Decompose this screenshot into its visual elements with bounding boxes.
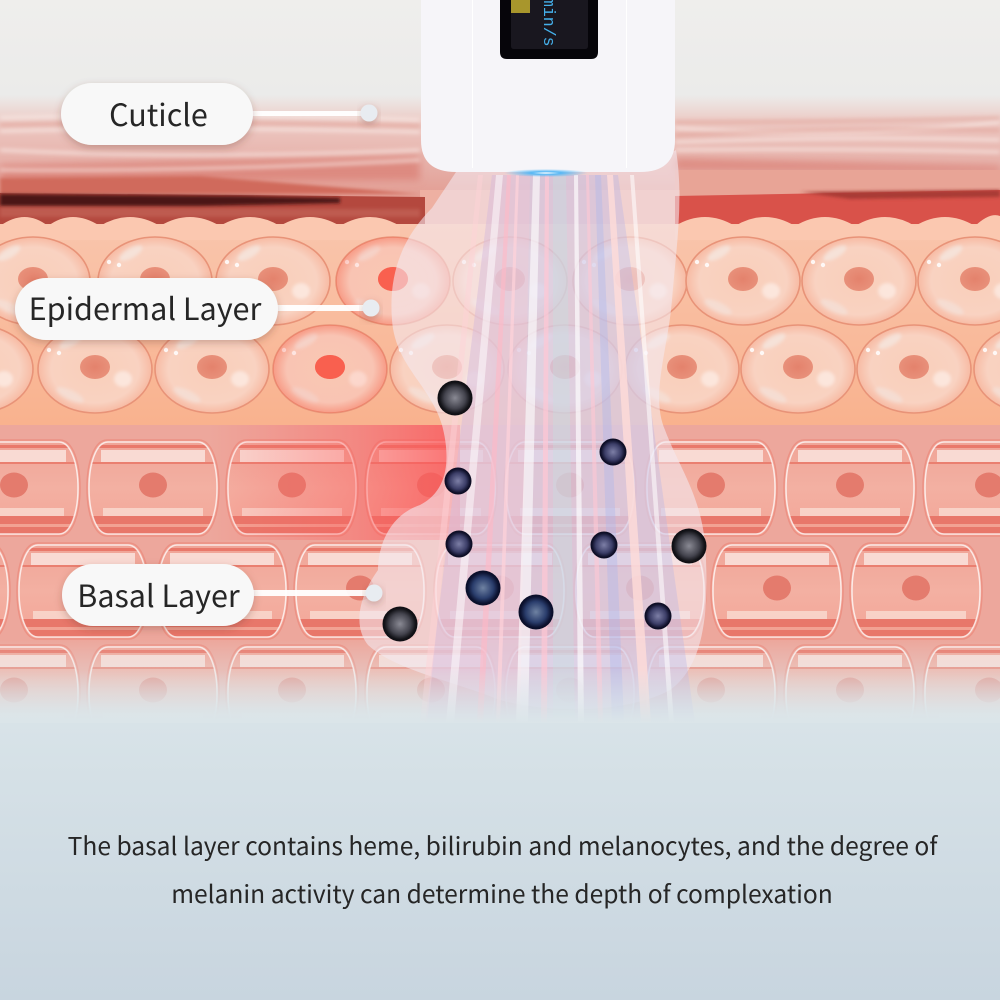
fade into lower panel [0, 640, 1000, 723]
label: Cuticle: Cuticle [109, 91, 208, 135]
device body [421, 0, 675, 172]
basal cells row 2 [0, 543, 982, 639]
device screen [500, 0, 598, 59]
epidermal cells row 2 [0, 325, 1000, 413]
translucent treated area [359, 150, 706, 709]
melanin particles [382, 380, 706, 642]
epidermal background [0, 224, 1000, 425]
light beams [420, 175, 695, 723]
caption text: The basal layer contains heme, bilirubin and melanocytes, and the degree of [68, 827, 938, 863]
basal cells row 3 [0, 645, 1000, 741]
label: Epidermal Layer [15, 278, 380, 340]
basal background [0, 425, 1000, 722]
beam fade at bottom [0, 670, 1000, 723]
epidermal cells row 1 [0, 237, 1000, 325]
device [421, 0, 675, 177]
red glow on basal cells [210, 425, 460, 540]
basal cells row 1 [0, 440, 1000, 536]
scale row [0, 215, 1000, 240]
label: Basal Layer: Basal Layer [77, 572, 240, 616]
red tint on epidermal cells [273, 237, 450, 413]
background: top area [0, 0, 1000, 190]
skin section: dark separation line [0, 190, 1000, 225]
caption text [68, 827, 938, 911]
lower panel [0, 723, 1000, 1000]
label: Cuticle [61, 83, 378, 145]
label: Basal Layer [62, 564, 382, 626]
label: Epidermal Layer: Epidermal Layer [29, 285, 262, 329]
caption text: melanin activity can determine the depth of complexation [171, 875, 833, 911]
device blue glow [504, 169, 588, 177]
skin section: cuticle band [0, 95, 1000, 225]
